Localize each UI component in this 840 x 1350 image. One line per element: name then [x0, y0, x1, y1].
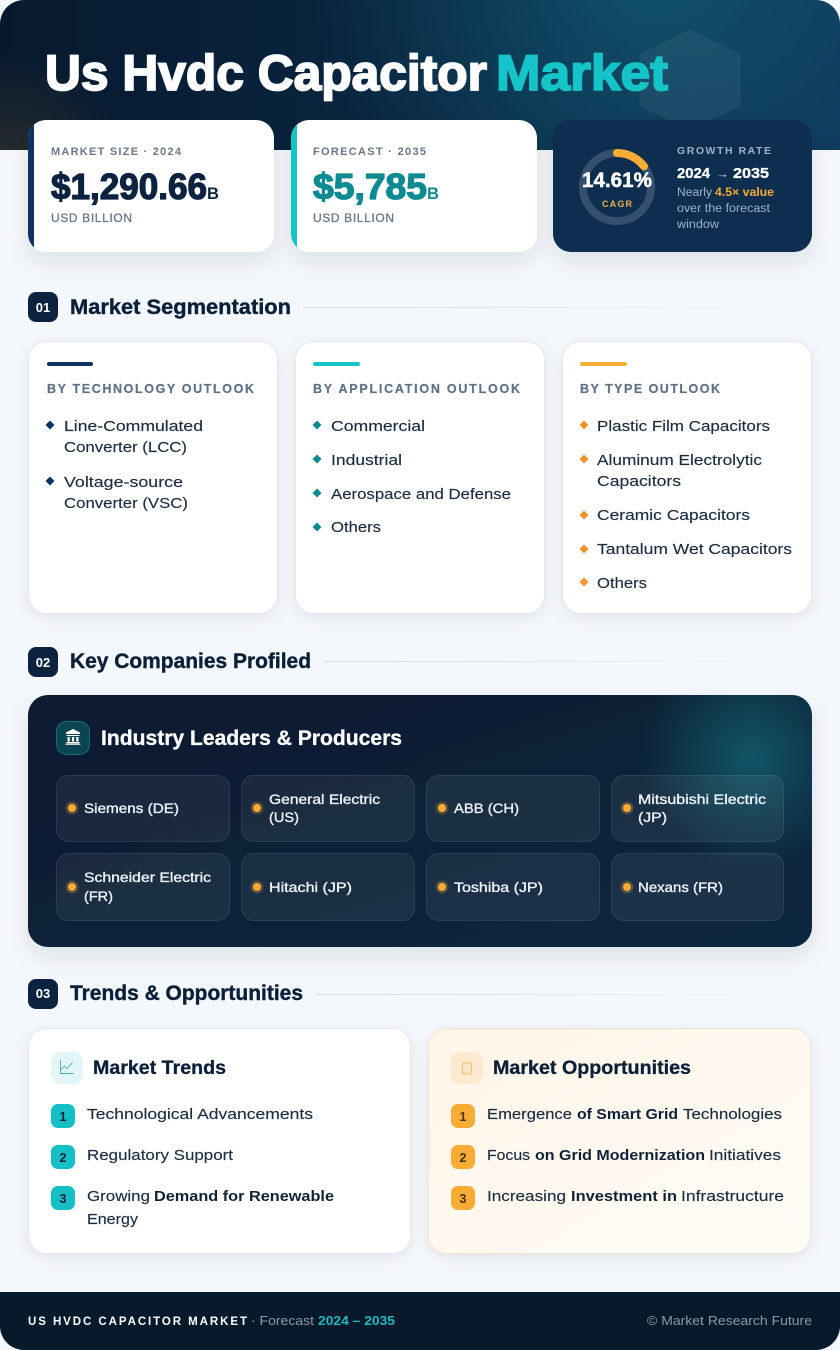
section heading 03 — [28, 979, 812, 1009]
opportunity 3: Increasing — [487, 1188, 566, 1205]
panel: by type outlook: Tantalum Wet Capacitors — [597, 541, 792, 558]
opportunity 3: Investment in — [571, 1188, 677, 1205]
opportunity 2 — [451, 1145, 781, 1169]
stat card: forecast 2035: B — [427, 184, 439, 203]
company: Nexans — [612, 854, 784, 920]
company: Mitsubishi Electric: Mitsubishi Electric — [638, 791, 766, 807]
section heading 01: Market Segmentation — [70, 296, 291, 319]
trend 3: Energy — [87, 1211, 139, 1228]
company: Siemens: Siemens (DE) — [84, 800, 179, 816]
trend 3 — [51, 1186, 334, 1228]
company: General Electric — [242, 776, 414, 842]
CAGR ring: CAGR — [602, 199, 632, 209]
panel: by technology outlook: Line-Commulated — [64, 418, 203, 435]
opportunity 1: 1 — [460, 1110, 467, 1124]
growth rate text: GROWTH RATE — [677, 145, 771, 157]
opportunity 1: of Smart Grid — [577, 1106, 678, 1123]
stat card: forecast 2035: USD BILLION — [313, 211, 394, 225]
stat card: forecast 2035: $5,785 — [313, 166, 427, 207]
growth rate text: over the forecast — [677, 203, 771, 215]
stat card: forecast 2035: FORECAST · 2035 — [313, 146, 426, 158]
stat card: market size 2024 — [28, 120, 274, 252]
panel: by technology outlook: BY TECHNOLOGY OUTLOOK — [47, 382, 254, 396]
panel: by type outlook: Capacitors — [597, 473, 681, 490]
opportunity 2: Focus — [487, 1147, 530, 1164]
panel: by application outlook: Industrial — [331, 452, 402, 469]
stat card: market size 2024: B — [207, 184, 219, 203]
section heading 03: Trends & Opportunities — [70, 982, 303, 1005]
opportunity 3 — [451, 1186, 784, 1210]
company: ABB — [426, 776, 600, 842]
panel: by application outlook: Aerospace and Defense — [331, 486, 511, 503]
opportunity 2: Initiatives — [709, 1147, 781, 1164]
panel: by type outlook — [562, 342, 812, 614]
panel: market opportunities — [428, 1028, 810, 1254]
panel: by type outlook: Aluminum Electrolytic — [597, 452, 763, 469]
opportunity 3: Infrastructure — [681, 1188, 784, 1205]
title: Market — [496, 45, 668, 101]
growth rate text: 4.5× value — [715, 187, 774, 199]
section heading 02: Key Companies Profiled — [70, 650, 311, 673]
company: General Electric: (US) — [269, 809, 299, 825]
icon: bank building — [56, 722, 90, 754]
trend 1: Technological Advancements — [87, 1106, 313, 1123]
growth rate text: window — [676, 219, 720, 231]
company: Hitachi: Hitachi (JP) — [269, 879, 352, 895]
panel: by technology outlook — [28, 342, 278, 614]
footer: US HVDC CAPACITOR MARKET — [28, 1316, 247, 1328]
panel: by type outlook: BY TYPE OUTLOOK — [580, 382, 720, 396]
panel: by type outlook: Ceramic Capacitors — [597, 507, 750, 524]
trend 2: 2 — [60, 1151, 67, 1165]
opportunity 1: Emergence — [487, 1106, 572, 1123]
company: Schneider Electric: (FR) — [84, 888, 113, 904]
section heading 03: 03 — [36, 986, 50, 1001]
panel: industry leaders and producers: Industry Leaders & Producers — [101, 727, 402, 750]
panel: by technology outlook: Converter (VSC) — [64, 495, 188, 512]
icon: line chart — [51, 1052, 83, 1084]
title: Us Hvdc Capacitor — [45, 45, 487, 101]
company: Schneider Electric — [56, 854, 230, 920]
growth rate text: Nearly — [677, 187, 712, 199]
opportunity 2: on Grid Modernization — [535, 1147, 705, 1164]
panel: market trends: Market Trends — [93, 1058, 226, 1079]
panel: by type outlook: Others — [597, 575, 647, 592]
panel: by application outlook — [296, 342, 544, 614]
section heading 02: 02 — [36, 655, 50, 670]
company: Toshiba — [426, 854, 600, 920]
section heading 02 — [28, 647, 812, 677]
growth rate text — [676, 145, 774, 231]
panel: by technology outlook: Converter (LCC) — [64, 439, 187, 456]
company: Hitachi — [242, 854, 414, 920]
company: Schneider Electric: Schneider Electric — [84, 869, 211, 885]
trend 1 — [51, 1104, 313, 1128]
footer — [0, 1292, 840, 1350]
trend 1: 1 — [60, 1110, 67, 1124]
stat card: market size 2024: USD BILLION — [51, 211, 132, 225]
section heading 01 — [28, 292, 812, 322]
company: ABB: ABB (CH) — [454, 800, 519, 816]
company: Mitsubishi Electric — [612, 776, 784, 842]
CAGR ring: 14.61% — [582, 169, 652, 192]
stat card: market size 2024: $1,290.66 — [51, 166, 207, 207]
trend 3: Growing — [87, 1188, 150, 1205]
company: Mitsubishi Electric: (JP) — [638, 809, 667, 825]
opportunity 1 — [451, 1104, 782, 1128]
opportunity 3: 3 — [460, 1192, 467, 1206]
opportunity 2: 2 — [460, 1151, 467, 1165]
stat card: market size 2024: MARKET SIZE · 2024 — [51, 146, 182, 158]
header banner — [0, 0, 840, 150]
panel: by application outlook: Commercial — [331, 418, 425, 435]
panel: market trends — [28, 1028, 410, 1254]
panel: by application outlook: Others — [331, 519, 381, 536]
company: General Electric: General Electric — [269, 791, 380, 807]
growth rate text: 2024 — [677, 166, 710, 182]
panel: market opportunities: Market Opportunities — [493, 1058, 691, 1079]
company: Toshiba: Toshiba (JP) — [454, 879, 543, 895]
growth rate text: 2035 — [733, 166, 769, 182]
section heading 01: 01 — [36, 300, 50, 315]
stat card: CAGR — [553, 120, 812, 252]
growth rate text: → — [716, 166, 729, 181]
panel: industry leaders and producers — [28, 695, 812, 947]
company: Siemens — [56, 776, 230, 842]
opportunity 1: Technologies — [683, 1106, 782, 1123]
trend 2 — [51, 1145, 234, 1169]
stat card: forecast 2035 — [291, 120, 537, 252]
trend 3: 3 — [60, 1192, 67, 1206]
footer: · Forecast — [251, 1314, 315, 1328]
trend 2: Regulatory Support — [87, 1147, 234, 1164]
company: Nexans: Nexans (FR) — [638, 879, 723, 895]
icon: missing glyph box — [451, 1052, 483, 1084]
panel: by application outlook: BY APPLICATION OUTLOOK — [313, 382, 520, 396]
trend 3: Demand for Renewable — [154, 1188, 334, 1205]
CAGR ring — [582, 153, 652, 221]
footer: 2024 – 2035 — [318, 1314, 395, 1328]
panel: by type outlook: Plastic Film Capacitors — [597, 418, 770, 435]
footer: © Market Research Future — [647, 1314, 812, 1328]
panel: by technology outlook: Voltage-source — [64, 474, 183, 491]
